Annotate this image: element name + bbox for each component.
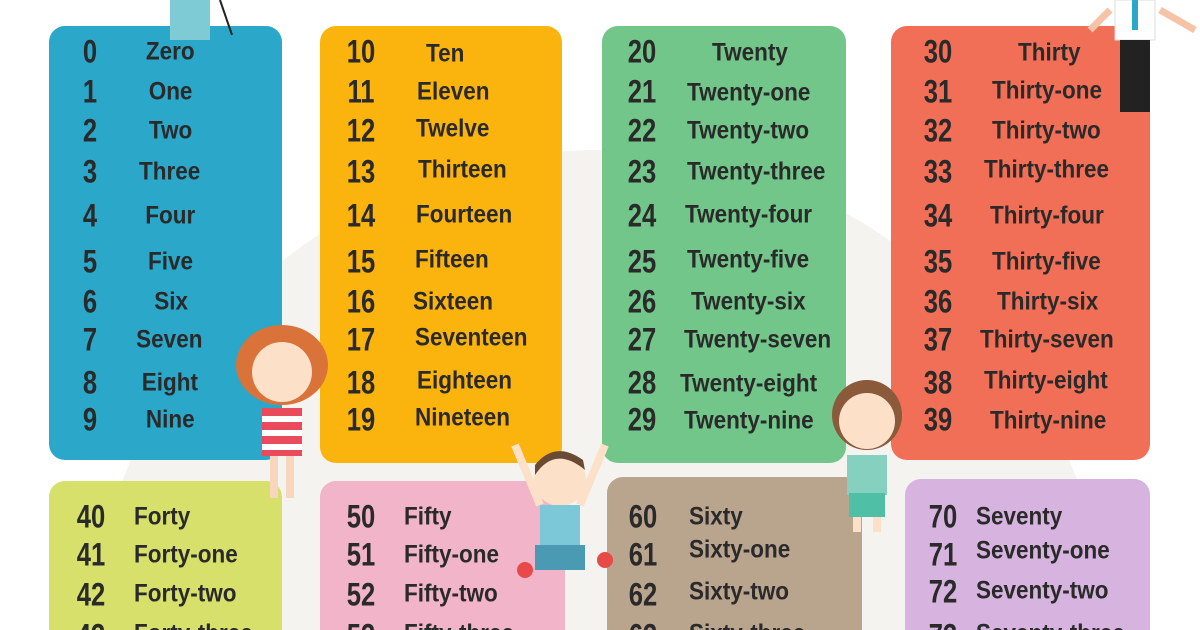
- text: Thirty-five: [992, 248, 1101, 276]
- text: 14: [347, 198, 375, 234]
- text: Ten: [426, 40, 464, 68]
- text: Two: [149, 116, 192, 144]
- text: Nineteen: [415, 404, 510, 432]
- text: 10: [347, 34, 375, 70]
- background circle: [90, 150, 1110, 630]
- text: 13: [347, 154, 375, 190]
- text: 9: [83, 402, 97, 438]
- text: Thirteen: [418, 156, 507, 184]
- text: Thirty-three: [984, 156, 1109, 184]
- text: 2: [83, 112, 97, 148]
- text: 71: [929, 536, 957, 572]
- text: Twenty-eight: [680, 370, 817, 398]
- text: 40: [77, 498, 105, 534]
- panel: 40s: [49, 481, 282, 630]
- text: Thirty-eight: [984, 366, 1108, 394]
- text: Eleven: [417, 78, 490, 106]
- text: Zero: [146, 38, 195, 66]
- panel: 70s: [905, 479, 1150, 630]
- text: Six: [154, 288, 188, 316]
- text: 15: [347, 244, 375, 280]
- text: Thirty: [1018, 38, 1081, 66]
- text: Twenty-one: [687, 78, 810, 106]
- text: Twelve: [416, 114, 489, 142]
- text: 7: [83, 322, 97, 358]
- panel: 30-39: [891, 26, 1150, 460]
- text: 18: [347, 364, 375, 400]
- icon: girl character: [236, 325, 328, 498]
- text: 72: [929, 574, 957, 610]
- text: 23: [628, 154, 656, 190]
- panel: 20-29: [602, 26, 846, 463]
- panel: 60s: [607, 477, 862, 630]
- text: Fifty-one: [404, 540, 499, 568]
- text: 8: [83, 364, 97, 400]
- text: 33: [924, 154, 952, 190]
- icon: jumping boy: [511, 444, 613, 578]
- text: 1: [83, 74, 97, 110]
- text: Sixty-two: [689, 578, 789, 606]
- text: Twenty-six: [691, 288, 806, 316]
- text: 37: [924, 322, 952, 358]
- text: Thirty-six: [997, 288, 1098, 316]
- text: 36: [924, 284, 952, 320]
- text: Fifty: [404, 502, 452, 530]
- text: 6: [83, 284, 97, 320]
- text: Sixty-one: [689, 536, 790, 564]
- panel: 0-9: [49, 26, 282, 460]
- text: Fifty-two: [404, 580, 498, 608]
- text: Forty-one: [134, 540, 238, 568]
- text: Thirty-two: [992, 116, 1101, 144]
- text: 20: [628, 34, 656, 70]
- text: Fifteen: [415, 246, 489, 274]
- text: Nine: [146, 406, 195, 434]
- text: 16: [347, 284, 375, 320]
- text: 30: [924, 34, 952, 70]
- text: 28: [628, 364, 656, 400]
- text: 52: [347, 576, 375, 612]
- text: 51: [347, 536, 375, 572]
- text: 34: [924, 198, 952, 234]
- text: 62: [629, 576, 657, 612]
- text: Twenty-two: [687, 116, 809, 144]
- text: Forty-two: [134, 580, 236, 608]
- text: Eighteen: [417, 366, 512, 394]
- icon: man top right: [1088, 0, 1197, 112]
- text: 4: [83, 198, 97, 234]
- text: 29: [628, 402, 656, 438]
- text: Thirty-nine: [990, 406, 1106, 434]
- text: Thirty-one: [992, 76, 1102, 104]
- text: Four: [145, 202, 195, 230]
- text: Twenty-five: [687, 246, 809, 274]
- text: 42: [77, 576, 105, 612]
- text: 61: [629, 536, 657, 572]
- text: Sixteen: [413, 288, 493, 316]
- text: 32: [924, 112, 952, 148]
- text: 39: [924, 402, 952, 438]
- text: One: [149, 78, 192, 106]
- text: 24: [628, 198, 656, 234]
- text: 50: [347, 498, 375, 534]
- text: Eight: [142, 368, 198, 396]
- panel: 10-19: [320, 26, 562, 463]
- text: Seven: [136, 326, 202, 354]
- text: 26: [628, 284, 656, 320]
- text: 21: [628, 74, 656, 110]
- text: 38: [924, 364, 952, 400]
- text: Thirty-seven: [980, 326, 1114, 354]
- icon: small boy: [832, 380, 902, 532]
- icon: teacher top: [170, 0, 233, 40]
- text: Sixty: [689, 502, 743, 530]
- text: 35: [924, 244, 952, 280]
- text: Twenty-three: [687, 158, 825, 186]
- text: 70: [929, 498, 957, 534]
- text: 19: [347, 402, 375, 438]
- panel: 50s: [320, 481, 565, 630]
- text: 27: [628, 322, 656, 358]
- text: Thirty-four: [990, 202, 1104, 230]
- text: 60: [629, 498, 657, 534]
- text: 12: [347, 112, 375, 148]
- text: Twenty-seven: [684, 326, 831, 354]
- text: Seventy-two: [976, 576, 1109, 604]
- text: 5: [83, 244, 97, 280]
- text: Five: [148, 248, 193, 276]
- text: Seventy: [976, 502, 1062, 530]
- text: 17: [347, 322, 375, 358]
- text: Twenty-four: [685, 200, 812, 228]
- text: 0: [83, 34, 97, 70]
- text: 3: [83, 154, 97, 190]
- text: Forty: [134, 502, 190, 530]
- text: Twenty: [712, 38, 788, 66]
- text: Twenty-nine: [684, 406, 814, 434]
- text: Seventeen: [415, 324, 528, 352]
- text: 41: [77, 536, 105, 572]
- text: 31: [924, 74, 952, 110]
- text: Fourteen: [416, 200, 512, 228]
- text: 22: [628, 112, 656, 148]
- text: Three: [139, 158, 200, 186]
- text: 25: [628, 244, 656, 280]
- text: 11: [347, 74, 375, 110]
- text: Seventy-one: [976, 536, 1110, 564]
